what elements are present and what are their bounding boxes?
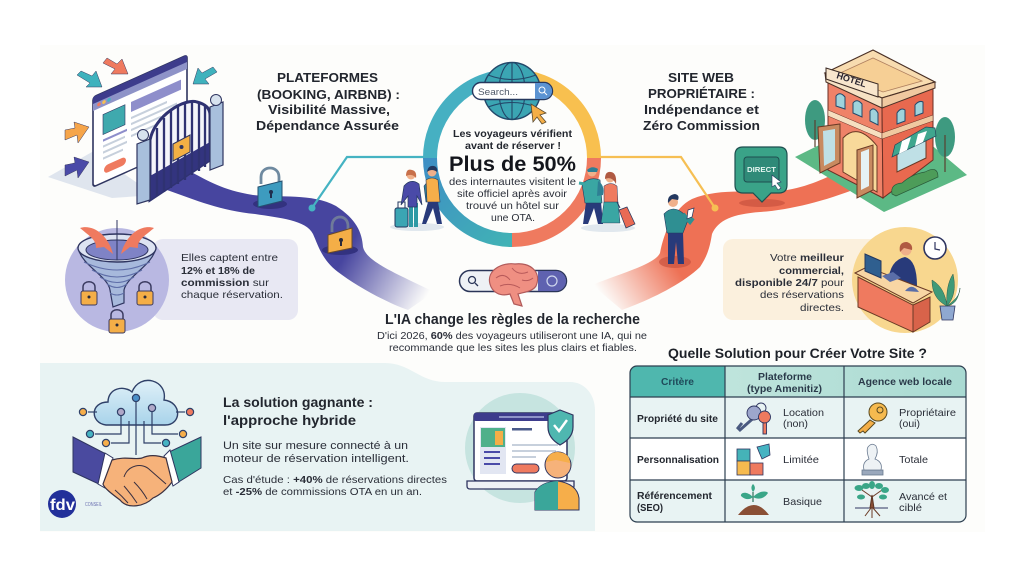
heading: hybrid solution: l'approche hybride	[223, 412, 356, 428]
table header text: (type Amenitiz)	[747, 383, 822, 395]
chart: central ring	[430, 76, 594, 240]
table cell text: Location	[783, 407, 824, 419]
commission text	[181, 252, 283, 301]
text block: hybrid description: moteur de réservation intelligent.	[223, 453, 409, 465]
table header text	[661, 371, 952, 395]
text block: hybrid description: Cas d'étude : +40% de réservations directes	[223, 474, 447, 486]
table header text: Critère	[661, 376, 694, 388]
text block: AI statistic: recommande que les sites les plus clairs et fiables.	[389, 342, 637, 354]
salesperson text: des réservations	[760, 289, 844, 301]
left path: OTA road	[167, 173, 434, 310]
commission text: 12% et 18% de	[181, 265, 255, 277]
panel: hybrid solution	[40, 363, 595, 531]
icon: left travelers	[390, 166, 444, 231]
table cell text: Avancé et	[899, 491, 947, 503]
text block: hybrid description: Un site sur mesure connecté à un	[223, 440, 408, 452]
table cell text	[783, 407, 956, 514]
connector dot: teal	[308, 204, 316, 212]
table row labels	[637, 413, 719, 514]
table cell text: Totale	[899, 454, 928, 466]
central text: statistic: des internautes visitent le	[449, 176, 576, 188]
text block: hybrid description	[223, 440, 447, 498]
table header text: Agence web locale	[858, 376, 952, 388]
heading: table title: Quelle Solution pour Créer Votre Site ?	[668, 345, 927, 361]
icon: orange padlock on road	[322, 217, 358, 255]
table cell text: Limitée	[783, 454, 819, 466]
central text: statistic	[449, 128, 576, 224]
connector: teal line	[312, 157, 424, 208]
table cell text: Propriétaire	[899, 407, 956, 419]
text block: AI statistic: D'ici 2026, 60% des voyageurs utiliseront une IA, qui ne	[377, 330, 647, 342]
icon: tree with roots	[854, 481, 889, 518]
icon: puzzle	[737, 444, 770, 475]
icon: gold key	[858, 403, 887, 433]
text block: AI statistic	[377, 330, 647, 354]
central text: statistic: avant de réserver !	[465, 140, 561, 152]
panel: commission callout	[153, 239, 298, 320]
table row labels: (SEO)	[637, 502, 663, 514]
icon: AI search bar with brain	[460, 264, 566, 306]
heading: platforms: Dépendance Assurée	[256, 118, 399, 133]
central text: statistic: Plus de 50%	[449, 153, 576, 176]
icon: direct bubble: DIRECT	[747, 167, 777, 174]
table: comparison	[630, 366, 966, 522]
salesperson text: commercial,	[779, 265, 844, 277]
heading: platforms: (BOOKING, AIRBNB) :	[257, 87, 400, 102]
icon: keys	[738, 403, 770, 434]
central text: statistic: Les voyageurs vérifient	[453, 128, 572, 140]
icon: bust	[862, 444, 883, 475]
central text: statistic: une OTA.	[491, 212, 535, 224]
table cell text: ciblé	[899, 502, 922, 514]
table row labels: Propriété du site	[637, 413, 718, 425]
icon: right travelers	[579, 167, 635, 232]
icon: funnel with padlocks	[65, 220, 169, 333]
logo: fdv conseil: fdv	[50, 497, 75, 514]
logo: fdv conseil	[48, 490, 102, 518]
commission text: chaque réservation.	[181, 289, 283, 301]
heading: hybrid solution: La solution gagnante :	[223, 394, 373, 410]
icon: teal padlock on road	[253, 168, 287, 209]
heading: own website: PROPRIÉTAIRE :	[648, 86, 755, 101]
heading: own website	[643, 70, 760, 133]
heading: AI: L'IA change les règles de la recherche	[385, 311, 640, 328]
salesperson text: Votre meilleur	[770, 252, 844, 264]
table row labels: Personnalisation	[637, 454, 719, 466]
panel: best salesperson callout	[723, 239, 883, 320]
icon: hotel building: HOTEL	[835, 70, 868, 89]
commission text: Elles captent entre	[181, 252, 278, 264]
salesperson text	[735, 252, 845, 314]
icon: globe with search bar: Search...	[478, 87, 518, 98]
salesperson text: directes.	[800, 302, 844, 314]
central text: statistic: trouvé un hôtel sur	[466, 200, 560, 212]
icon: cloud and handshake	[73, 380, 201, 506]
connector: yellow line	[600, 157, 715, 208]
table cell text: (non)	[783, 418, 808, 430]
table cell text: (oui)	[899, 418, 920, 430]
icon: hotel building	[795, 50, 967, 212]
right path: direct road	[592, 176, 858, 310]
icon: sprout	[738, 484, 769, 515]
table header text: Plateforme	[758, 371, 812, 383]
heading: hybrid solution	[223, 394, 373, 428]
heading: platforms	[256, 70, 400, 133]
icon: globe with search bar	[472, 62, 552, 124]
commission text: commission sur	[181, 277, 270, 289]
icon: browser window behind the gate	[48, 55, 187, 198]
icon: receptionist at desk	[852, 227, 960, 333]
central text: statistic: site officiel après avoir	[457, 188, 568, 200]
connector dot: yellow	[712, 204, 718, 212]
heading: own website: Indépendance et	[644, 102, 760, 117]
logo: fdv conseil: CONSEIL	[85, 502, 102, 508]
table row labels: Référencement	[637, 490, 712, 502]
icon: direct bubble	[735, 147, 787, 207]
text block: hybrid description: et -25% de commissions OTA en un an.	[223, 486, 422, 498]
icon: laptop with shield and user	[465, 393, 579, 510]
salesperson text: disponible 24/7 pour	[735, 277, 845, 289]
heading: own website: Zéro Commission	[643, 118, 760, 133]
heading: own website: SITE WEB	[668, 70, 734, 85]
heading: platforms: Visibilité Massive,	[268, 102, 390, 117]
icon: locked gate	[137, 94, 223, 204]
heading: platforms: PLATEFORMES	[277, 70, 378, 85]
table cell text: Basique	[783, 496, 822, 508]
icon: person with phone	[659, 194, 694, 268]
icon: arrows pointing into the platform	[65, 58, 217, 178]
